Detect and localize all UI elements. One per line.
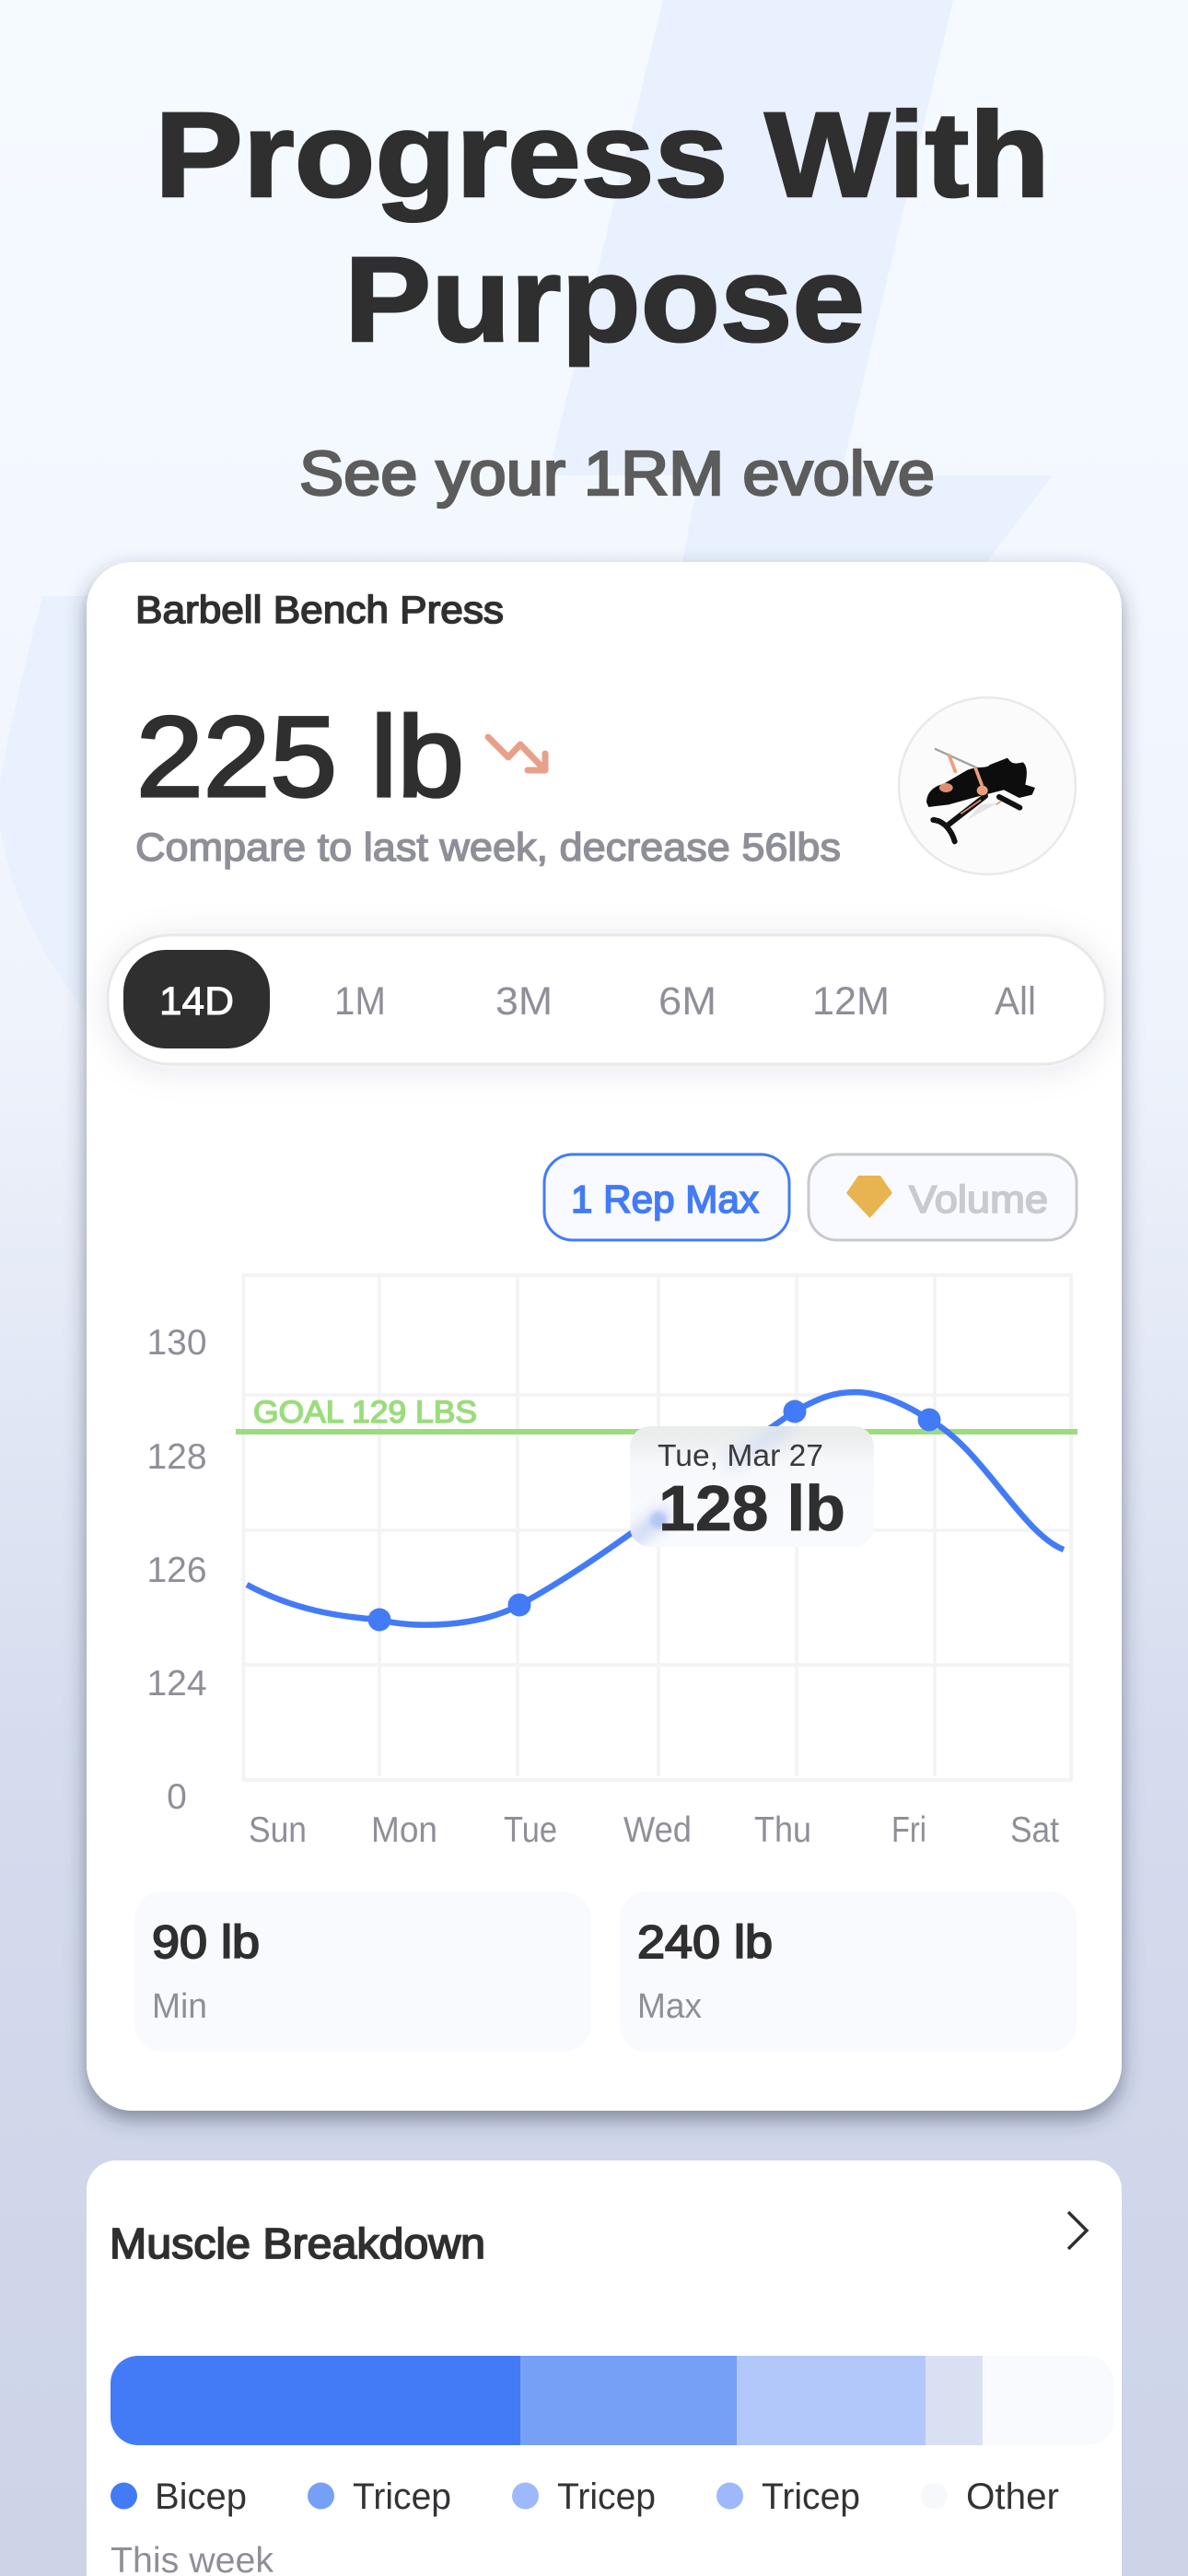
stacked bar	[111, 2356, 983, 2445]
1RM curve	[247, 1392, 1064, 1625]
x axis labels: Wed	[623, 1810, 692, 1850]
legend item: bicep: Bicep	[155, 2476, 247, 2517]
active tab: 14D	[123, 950, 270, 1048]
title: Purpose	[344, 231, 865, 367]
legend	[111, 2476, 1059, 2517]
tooltip: 128 lb	[658, 1472, 845, 1544]
heading: Muscle Breakdown	[110, 2219, 485, 2267]
x axis labels: Sat	[1010, 1810, 1059, 1850]
inactive tabs: 3M	[495, 979, 553, 1024]
x axis labels: Tue	[504, 1810, 557, 1850]
tooltip	[626, 1423, 874, 1547]
legend item: bicep	[111, 2476, 247, 2517]
metric toggle: 1 rep max: 1 Rep Max	[571, 1177, 759, 1221]
inactive tabs: All	[995, 979, 1036, 1024]
stat: maximum: Max	[637, 1987, 702, 2026]
inactive tabs: 12M	[812, 979, 890, 1024]
subtitle: See your 1RM evolve	[299, 439, 935, 509]
stat: maximum	[620, 1891, 1077, 2052]
legend item: tricep: Tricep	[762, 2476, 860, 2517]
legend item: tricep	[512, 2476, 656, 2517]
panel: barbell bench press card	[87, 562, 1122, 2111]
y axis labels: 0	[167, 1777, 187, 1817]
legend item: tricep: Tricep	[353, 2476, 451, 2517]
title: Progress With	[155, 87, 1050, 222]
metric toggle: volume: Volume	[909, 1177, 1048, 1221]
active tab: 14D: 14D	[159, 979, 234, 1024]
background lightning bolt	[0, 0, 1053, 1013]
current 1RM value: 225 lb	[136, 694, 464, 821]
icon: trend down arrow	[488, 737, 545, 770]
goal line	[236, 1395, 1077, 1434]
chart grid	[243, 1275, 1071, 1780]
stat: minimum: Min	[152, 1987, 207, 2026]
x axis labels: Thu	[754, 1810, 811, 1850]
data points	[368, 1400, 941, 1631]
line chart	[147, 1275, 1077, 1850]
icon: exercise thumbnail	[899, 697, 1076, 874]
exercise name: Barbell Bench Press	[135, 588, 504, 631]
icon: premium diamond	[846, 1176, 892, 1218]
tooltip: Tue, Mar 27	[658, 1438, 823, 1472]
legend item: tricep	[308, 2476, 451, 2517]
x axis labels: Mon	[371, 1810, 437, 1850]
card background	[87, 2160, 1122, 2576]
comparison text: Compare to last week, decrease 56lbs	[135, 825, 841, 870]
legend item: other	[921, 2476, 1059, 2517]
x axis labels: Sun	[249, 1810, 307, 1850]
goal line: GOAL 129 LBS	[253, 1395, 477, 1430]
y axis labels: 126	[147, 1551, 206, 1590]
inactive tabs	[334, 979, 1036, 1024]
legend item: tricep: Tricep	[557, 2476, 656, 2517]
card background	[87, 562, 1122, 2111]
x axis labels	[249, 1810, 1059, 1850]
panel: muscle breakdown	[87, 2160, 1122, 2576]
title	[155, 87, 1050, 367]
y axis labels: 124	[147, 1664, 206, 1704]
stat: minimum: 90 lb	[152, 1916, 260, 1968]
icon: chevron right	[1068, 2212, 1087, 2249]
legend item: tricep	[716, 2476, 860, 2517]
time range selector	[108, 935, 1105, 1064]
stat: maximum: 240 lb	[637, 1916, 773, 1968]
inactive tabs: 1M	[334, 979, 386, 1024]
legend item: other: Other	[966, 2476, 1059, 2517]
metric toggle: 1 rep max	[544, 1154, 789, 1240]
inactive tabs: 6M	[658, 979, 716, 1024]
metric toggle: volume	[809, 1154, 1077, 1240]
stat: minimum	[134, 1891, 591, 2052]
y axis labels	[147, 1323, 206, 1817]
x axis labels: Fri	[891, 1810, 926, 1850]
y axis labels: 130	[147, 1323, 206, 1363]
y axis labels: 128	[147, 1437, 206, 1477]
